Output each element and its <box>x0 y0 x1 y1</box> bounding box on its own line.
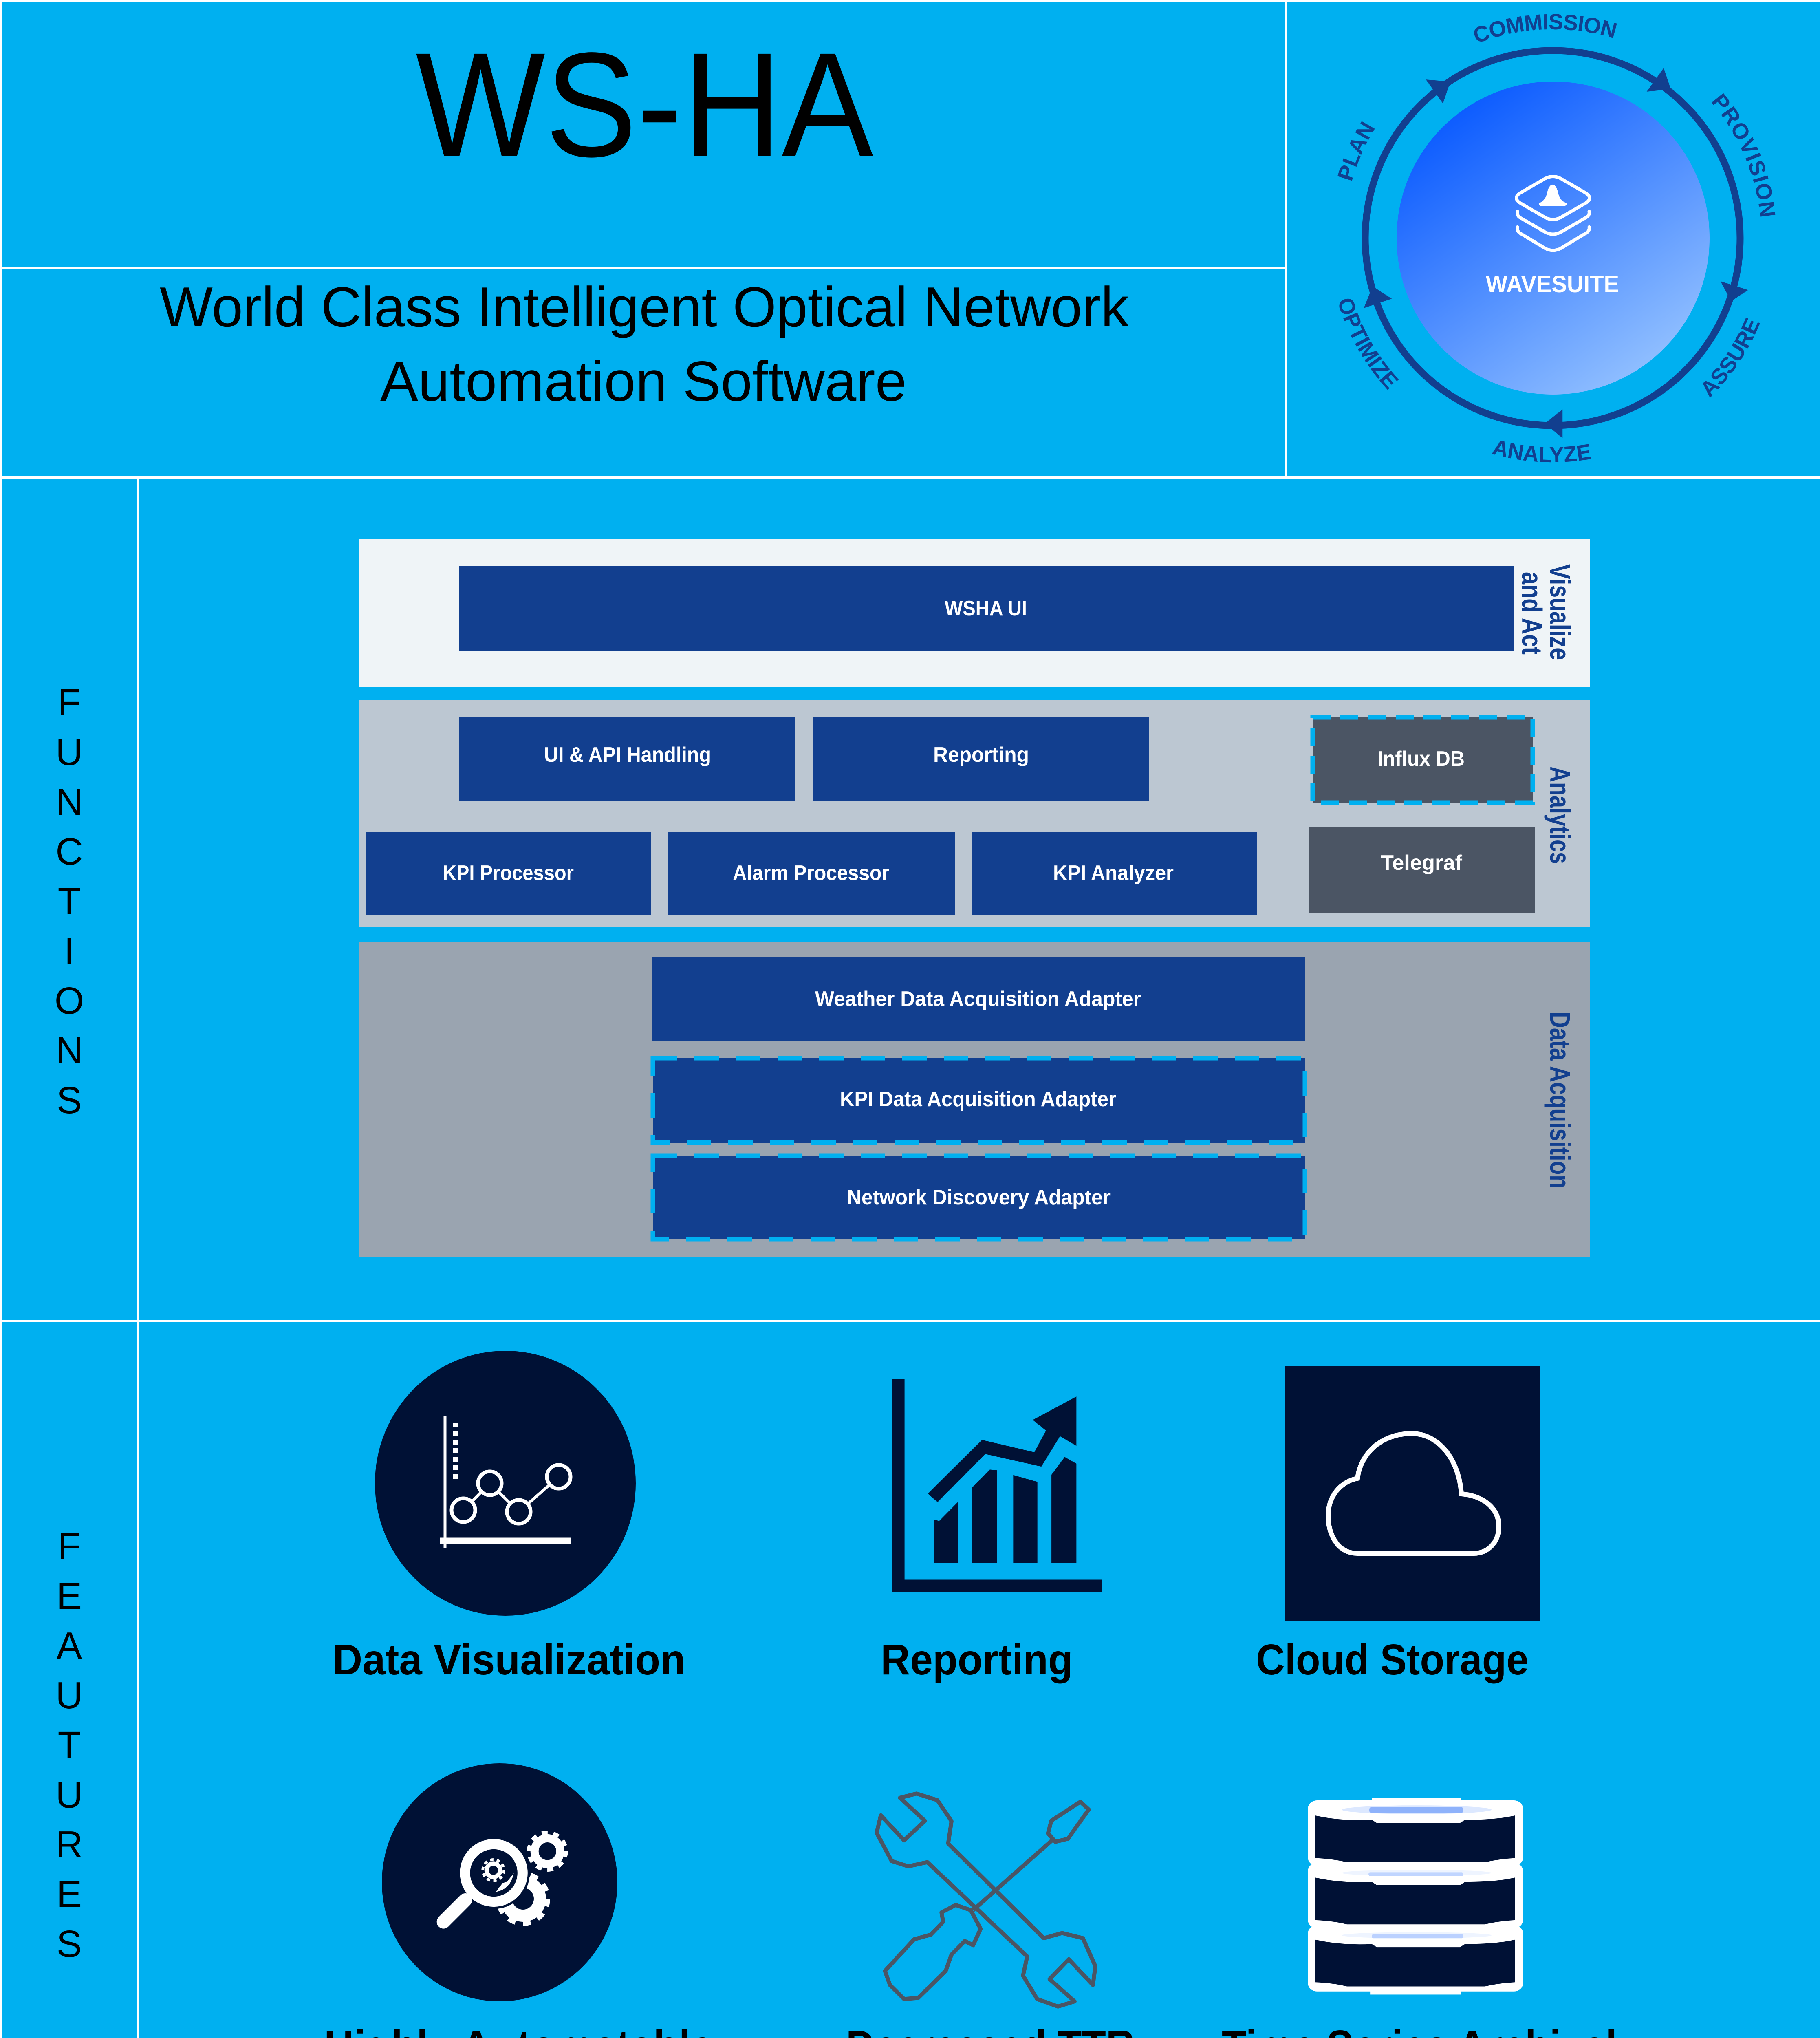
label: Reporting <box>881 1636 1073 1684</box>
layer: data acquisition <box>359 942 1590 1257</box>
row label: functions: F <box>58 681 81 723</box>
row label: features <box>55 1525 83 1965</box>
layer: data acquisition: KPI Data Acquisition Adapter <box>840 1087 1116 1111</box>
layer: data acquisition: Weather Data Acquisition Adapter <box>815 987 1141 1011</box>
layer: data acquisition: Network Discovery Adapter <box>847 1186 1111 1209</box>
inner gradient circle <box>1397 82 1710 395</box>
lifecycle ring <box>1365 51 1740 426</box>
layer: visualize and act: and Act <box>1516 572 1548 655</box>
feature: reporting <box>881 1379 1102 1684</box>
row label: features: T <box>58 1724 81 1766</box>
layer: analytics: Reporting <box>933 743 1029 767</box>
WaveSuite lifecycle diagram <box>1333 10 1780 467</box>
label: Data Visualization <box>333 1636 685 1684</box>
label: Cloud Storage <box>1256 1636 1529 1684</box>
layer: visualize and act <box>359 539 1590 687</box>
icon: WaveSuite layers <box>1516 176 1589 250</box>
ring arrowheads <box>1364 68 1748 438</box>
layer: visualize and act: Visualize <box>1544 564 1576 660</box>
feature: decreased ttr <box>846 1793 1135 2038</box>
layer: analytics <box>359 700 1590 927</box>
row label: features: E <box>57 1873 82 1915</box>
lifecycle stage labels: OPTIMIZE <box>1333 295 1403 394</box>
layer: analytics: UI & API Handling <box>544 743 711 767</box>
panel: architecture diagram <box>359 539 1590 1257</box>
feature: highly automatable <box>324 1763 714 2038</box>
row label: features: U <box>55 1674 83 1716</box>
row label: functions: S <box>57 1079 82 1121</box>
row label: functions: O <box>55 979 84 1022</box>
row label: functions: I <box>64 930 75 972</box>
lifecycle stage labels <box>1333 10 1780 467</box>
icon: magnifier and gears <box>382 1763 617 2001</box>
row label: functions: T <box>58 880 81 922</box>
row label: features: R <box>55 1823 83 1866</box>
row label: features: S <box>57 1923 82 1965</box>
icon: crossed wrench and screwdriver <box>877 1793 1095 2007</box>
row label: functions: N <box>55 781 83 823</box>
subtitle <box>160 276 1129 413</box>
row label: features: U <box>55 1773 83 1816</box>
icon: cloud on dark square <box>1285 1366 1540 1621</box>
feature: data visualization <box>333 1351 685 1684</box>
row label: features: E <box>57 1575 82 1617</box>
lifecycle stage labels: PROVISION <box>1707 89 1780 220</box>
lifecycle stage labels: ASSURE <box>1696 315 1765 401</box>
lifecycle stage labels: ANALYZE <box>1490 435 1593 467</box>
layer: analytics: Analytics <box>1544 766 1576 864</box>
title: WS-HA <box>416 22 874 188</box>
layer: data acquisition: Data Acquisition <box>1544 1012 1576 1189</box>
row label: functions <box>55 681 84 1121</box>
layer: analytics: Alarm Processor <box>733 861 889 885</box>
row label: functions: U <box>55 731 83 773</box>
layer: analytics: Telegraf <box>1381 851 1463 875</box>
icon: database stack <box>1308 1798 1523 1994</box>
layer: analytics: Influx DB <box>1377 747 1465 771</box>
layer: analytics: KPI Processor <box>443 861 574 885</box>
subtitle: World Class Intelligent Optical Network <box>160 276 1129 339</box>
feature: time series archival <box>1222 1798 1617 2038</box>
row label: features: A <box>57 1624 82 1667</box>
lifecycle stage labels: PLAN <box>1333 118 1380 183</box>
layer: visualize and act: WSHA UI <box>945 597 1027 620</box>
layer: analytics: KPI Analyzer <box>1053 861 1174 885</box>
row label: functions: N <box>55 1029 83 1072</box>
icon: rising bar chart <box>892 1379 1102 1592</box>
icon: line chart in circle <box>375 1351 636 1616</box>
feature: cloud storage <box>1256 1366 1540 1684</box>
lifecycle stage labels: COMMISSION <box>1470 10 1619 48</box>
subtitle: Automation Software <box>380 350 907 413</box>
wavesuite label: WAVESUITE <box>1486 271 1619 298</box>
row label: features: F <box>58 1525 81 1567</box>
row label: functions: C <box>55 830 83 873</box>
